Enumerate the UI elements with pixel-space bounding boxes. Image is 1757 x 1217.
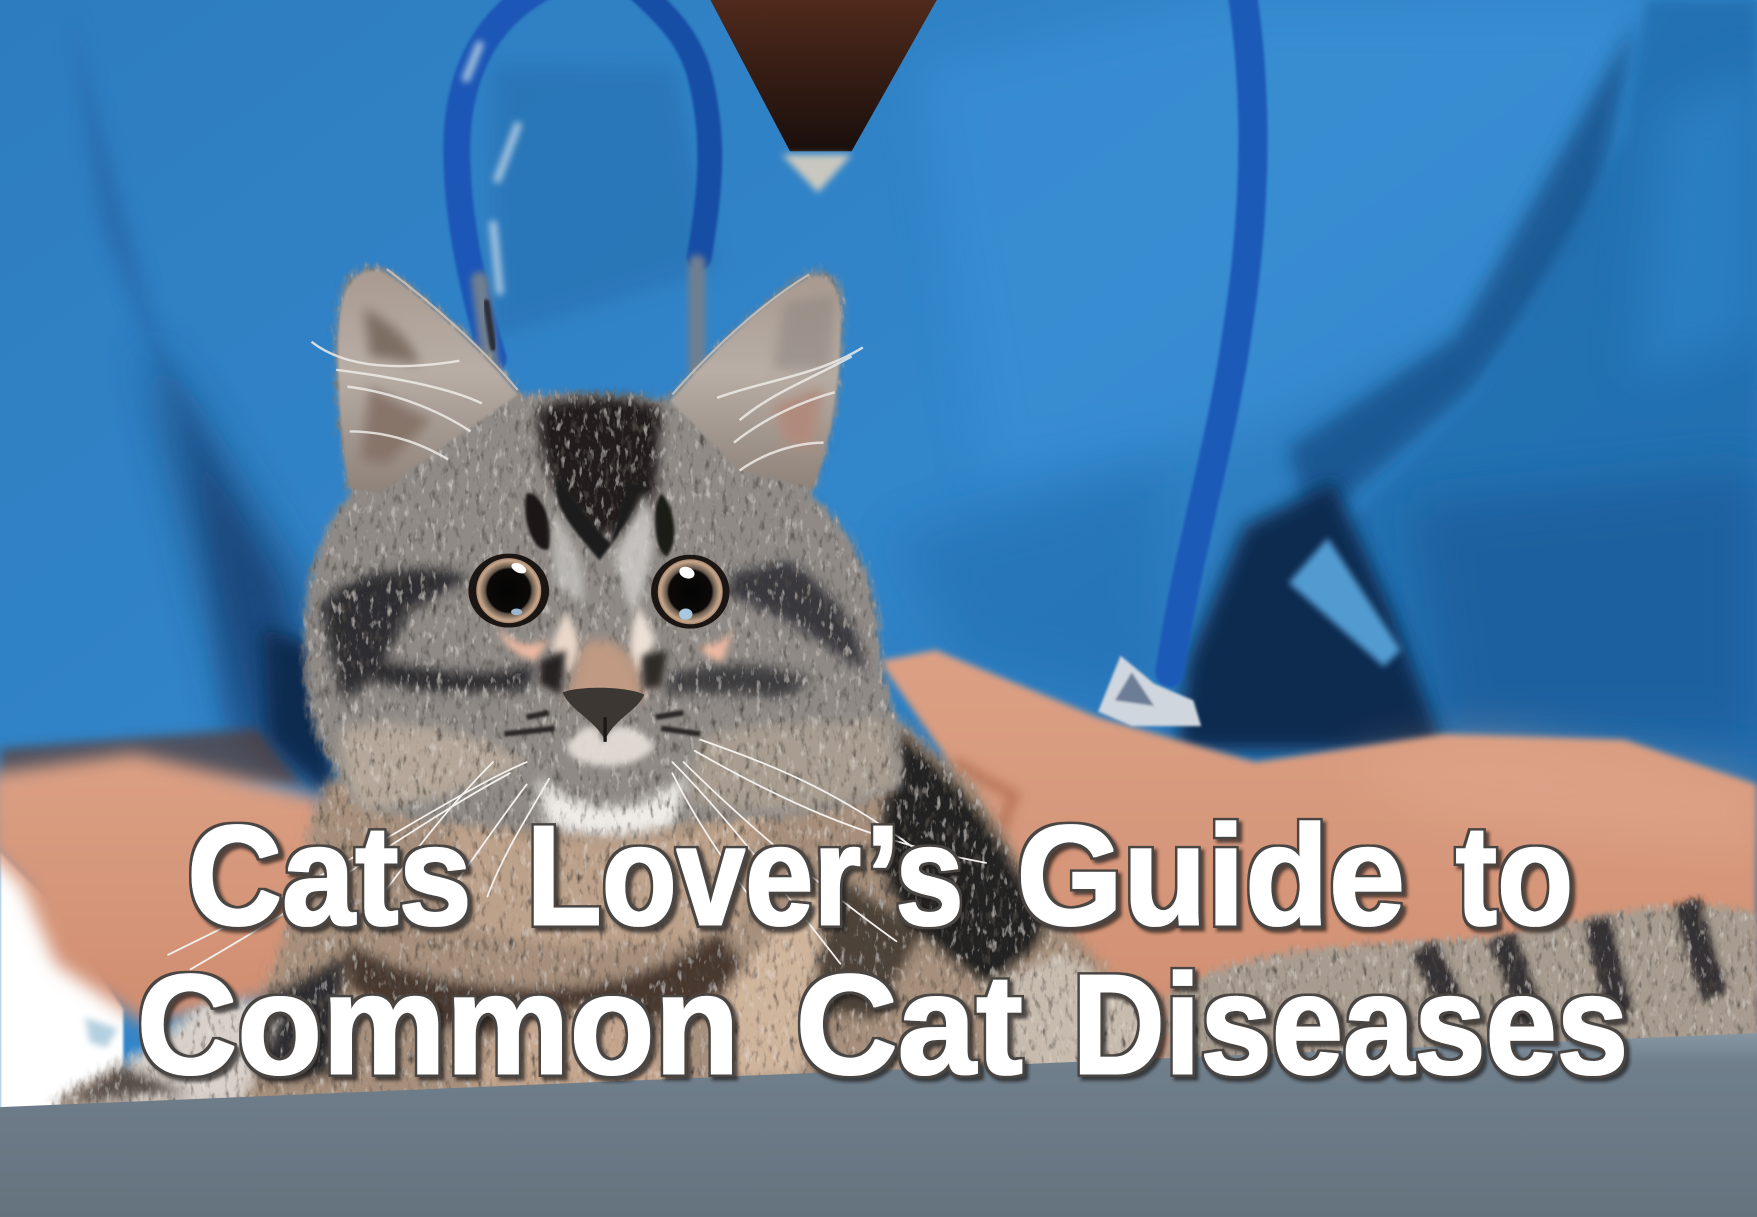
cat muzzle and nose bridge <box>566 640 644 700</box>
left arm <box>0 753 325 1025</box>
cat tail <box>1165 902 1757 1076</box>
cat forehead markings <box>525 476 674 675</box>
title line 1 <box>187 797 1573 956</box>
cat whiskers <box>168 740 986 969</box>
sleeve hem <box>0 728 303 784</box>
title line 1: Cats <box>187 797 472 956</box>
white background patch <box>0 852 123 1109</box>
cat ears <box>338 271 841 493</box>
title line 2: Common <box>137 946 740 1105</box>
cat <box>56 266 1177 1132</box>
title line 2: Diseases <box>1072 946 1628 1105</box>
right arm and hand <box>880 650 1757 1076</box>
cat nose <box>504 688 700 766</box>
stethoscope chest piece <box>1098 656 1201 726</box>
title line 1: Guide <box>1016 797 1405 956</box>
title line 1: Lover’s <box>527 797 964 956</box>
cat ear hair tufts <box>312 269 863 471</box>
title <box>137 797 1628 1105</box>
neck and collar <box>710 0 937 193</box>
table <box>0 1033 1757 1217</box>
pale blue cloth scrap <box>85 1018 118 1048</box>
stethoscope <box>457 0 1253 672</box>
title line 2: Cat <box>796 946 1023 1105</box>
cat eyes <box>468 554 729 629</box>
cat head <box>304 266 903 835</box>
title line 1: to <box>1456 797 1573 956</box>
cat body <box>56 717 1177 1132</box>
title line 2 <box>137 946 1628 1105</box>
dark fold under arm <box>1177 482 1445 751</box>
